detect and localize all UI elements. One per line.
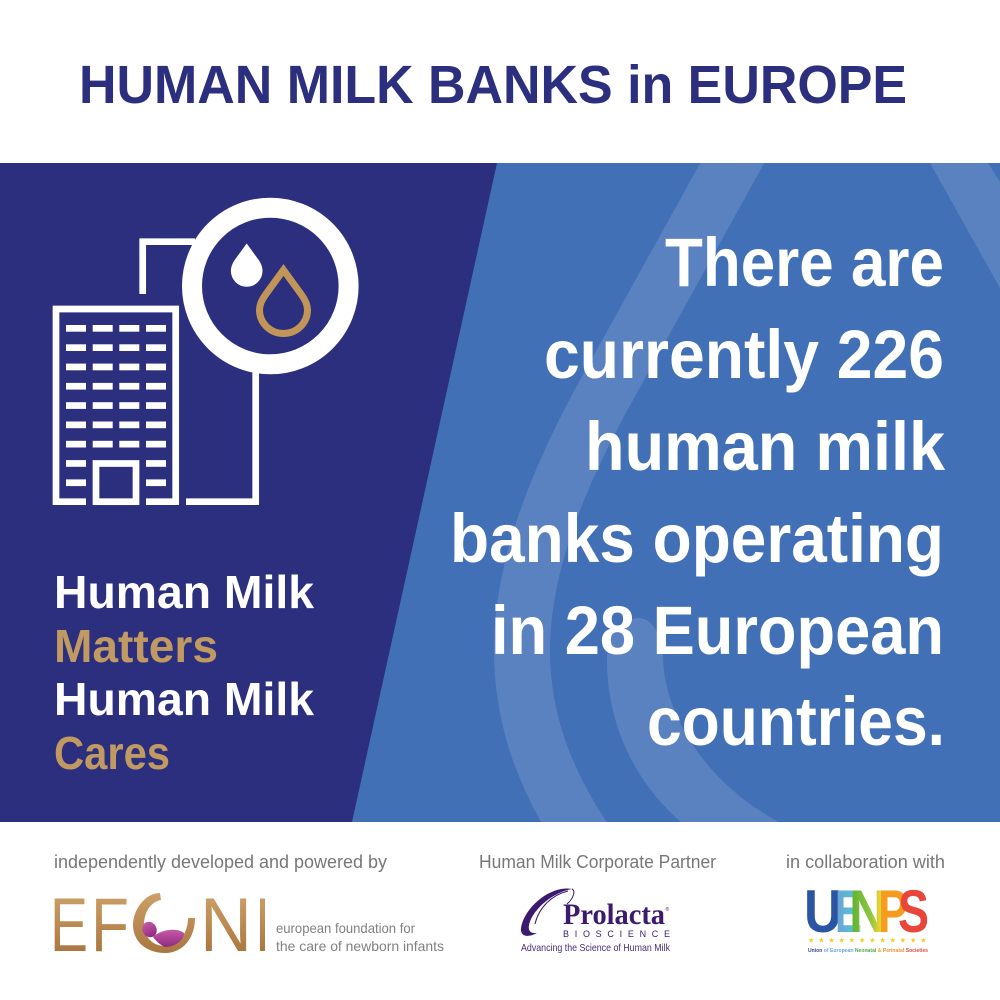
credit label: corporate partner: Human Milk Corporate Partner bbox=[479, 852, 716, 872]
background drop outlines bbox=[522, 140, 1000, 840]
logo: Prolacta Bioscience: ® bbox=[666, 906, 670, 913]
logo: UENPS: U bbox=[804, 878, 842, 945]
tagline: Matters bbox=[54, 620, 218, 672]
statistic text: human milk bbox=[585, 408, 946, 485]
icon: building outline bbox=[56, 309, 176, 502]
icon: magnifier ring bbox=[192, 208, 349, 364]
tagline: Human Milk bbox=[54, 566, 314, 618]
stars: ★★★★★★★★★★★★ bbox=[808, 936, 926, 944]
icon: gold drop bbox=[260, 270, 308, 334]
tagline: Human Milk bbox=[54, 673, 314, 725]
logo: EFCNI: I bbox=[255, 883, 270, 968]
logo strapline: european foundation for bbox=[276, 920, 415, 936]
logo: UENPS: P bbox=[878, 878, 908, 945]
statistic text bbox=[450, 224, 946, 760]
logo swirl bbox=[521, 889, 572, 936]
icon: connector lines bbox=[143, 242, 256, 502]
panel: statistic on blue background bbox=[352, 163, 1000, 822]
logo: Prolacta Bioscience: BIOSCIENCE bbox=[563, 929, 670, 939]
credit label: collaboration: in collaboration with bbox=[786, 852, 945, 872]
logo: Prolacta Bioscience bbox=[521, 889, 671, 954]
logo: UENPS: E bbox=[835, 878, 862, 945]
logo: EFCNI bbox=[50, 883, 444, 968]
logo: EFCNI: the care of newborn infants bbox=[276, 938, 444, 954]
title: HUMAN MILK BANKS in EUROPE bbox=[79, 55, 907, 115]
logo strapline: Union of European Neonatal & Perinatal Societies bbox=[808, 948, 928, 954]
icon: windows bbox=[66, 325, 166, 486]
logo: EFCNI: N bbox=[200, 883, 252, 968]
logo: UENPS: N bbox=[849, 878, 887, 945]
icon: white drop bbox=[231, 244, 262, 287]
icon: hospital building with magnifier and milk drops bbox=[56, 208, 349, 502]
logo: UENPS: S bbox=[898, 878, 929, 945]
tagline: Cares bbox=[54, 727, 170, 779]
icon: door bbox=[96, 464, 136, 502]
logo: EFCNI: E bbox=[50, 883, 88, 968]
tagline bbox=[54, 566, 314, 779]
logo mark: C with infant bbox=[133, 893, 195, 953]
logo: Prolacta Bioscience: Advancing the Science of Human Milk bbox=[521, 942, 671, 954]
statistic text: countries. bbox=[647, 683, 945, 760]
statistic text: in 28 European bbox=[491, 592, 944, 669]
logo: UENPS bbox=[804, 878, 929, 954]
footer credits bbox=[50, 852, 945, 968]
statistic text: banks operating bbox=[450, 500, 944, 577]
logo: Prolacta Bioscience: Prolacta bbox=[563, 898, 665, 931]
logo: EFCNI: F bbox=[91, 883, 129, 968]
statistic text: currently 226 bbox=[544, 316, 944, 393]
panel: navy slanted tagline panel bbox=[0, 163, 497, 822]
credit label: developer: independently developed and powered by bbox=[54, 852, 387, 872]
statistic text: There are bbox=[665, 224, 944, 301]
